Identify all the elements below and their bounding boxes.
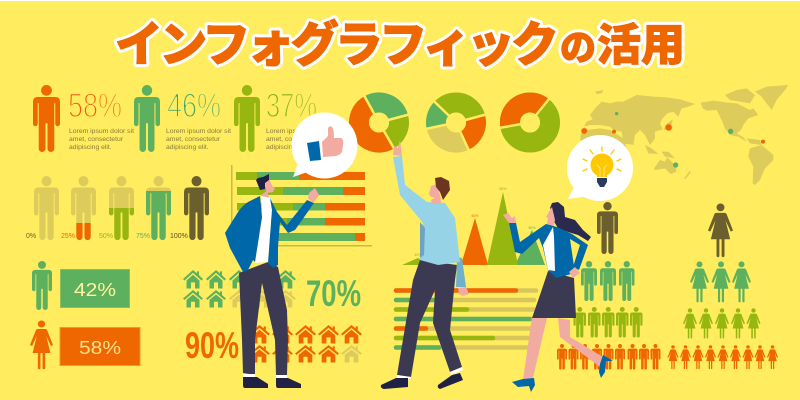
face and neck — [546, 207, 555, 230]
person 75%: 75% — [136, 233, 150, 240]
figure: woman walking — [503, 202, 613, 392]
person 25%: 25% — [61, 233, 75, 240]
person 100%: 100% — [170, 233, 188, 240]
text: 70%: 70% — [306, 273, 361, 314]
stat: 58%: Lorem ipsum dolor sit — [69, 128, 134, 135]
stat: 58%: 58% — [68, 87, 122, 125]
stat: 37%: adipiscing — [266, 144, 296, 151]
stat: 46%: amet, consectetur — [166, 136, 221, 143]
speech bubble: idea — [567, 135, 633, 201]
figure: man reaching up to the donut — [381, 140, 469, 389]
speech bubble: thumbs up — [292, 112, 358, 178]
stat: 46%: adipiscing elit. — [166, 144, 209, 151]
title: インフォグラフィック — [115, 5, 559, 75]
stat: 46%: Lorem ipsum dolor sit — [166, 128, 231, 135]
panel: gender ratio — [30, 261, 140, 369]
chart: triangles: 40% — [414, 253, 422, 257]
trousers — [397, 260, 462, 377]
shoes — [243, 374, 301, 388]
title: 活用 — [597, 9, 685, 73]
hands — [393, 140, 469, 296]
person 25% — [61, 176, 96, 240]
stat: 37%: Lorem ipsum — [266, 128, 306, 135]
title: インフォグラフィック — [115, 5, 559, 75]
sweater — [393, 156, 460, 265]
stat: 37%: amet, con — [266, 136, 296, 143]
shirt — [255, 196, 272, 263]
female 58%: 58% — [79, 338, 121, 358]
chart: triangles: 80% — [499, 187, 507, 191]
chart: triangles — [402, 187, 545, 265]
trousers — [239, 262, 288, 375]
person 75% — [136, 176, 171, 240]
panel: three percentage statistics — [33, 85, 317, 152]
stat: 37%: 37% — [266, 87, 317, 125]
panel: filled people progress row — [26, 176, 209, 240]
icon: light bulb — [583, 147, 621, 187]
jacket — [509, 223, 588, 278]
pyramid: women — [668, 204, 778, 369]
title: 活用 — [597, 9, 685, 73]
chart: horizontal progress lines — [396, 290, 536, 348]
person 0%: 0% — [26, 233, 36, 240]
panel: houses 70% — [183, 270, 361, 314]
stat: 37% — [234, 85, 317, 152]
hair — [550, 202, 591, 241]
chart: donut 3 — [500, 98, 553, 146]
person 50%: 50% — [99, 233, 113, 240]
world map — [580, 85, 788, 185]
jacket — [225, 196, 314, 272]
stat: 46%: 46% — [167, 87, 221, 125]
pyramid: men — [557, 202, 660, 370]
stat: 58% — [33, 85, 134, 152]
title: の — [560, 19, 596, 71]
person 50% — [99, 176, 134, 240]
chart: triangles: 50% — [528, 226, 536, 230]
skirt — [532, 271, 576, 318]
shoes — [512, 355, 613, 392]
stat: 58%: adipiscing elit. — [69, 144, 112, 151]
back arm — [456, 257, 466, 287]
person 0% — [26, 176, 59, 240]
title: の — [560, 19, 596, 71]
shoes — [381, 367, 463, 389]
stat: 46% — [134, 85, 231, 152]
hands — [503, 213, 580, 278]
stat: 58%: amet, consectetur — [69, 136, 124, 143]
chart: stacked horizontal bars — [231, 165, 372, 246]
head — [429, 177, 450, 204]
chart: donut 1 — [352, 95, 409, 150]
donut holes — [369, 112, 540, 132]
text: 90%: 90% — [185, 325, 239, 366]
blouse — [543, 227, 555, 271]
panel: houses 90% — [185, 325, 362, 366]
legs — [523, 317, 603, 382]
male 42%: 42% — [74, 280, 116, 300]
chart: donut 2 — [426, 94, 486, 151]
person 100% — [170, 176, 209, 240]
figure: man pointing at the bar chart — [225, 174, 319, 388]
hand — [308, 188, 319, 203]
chart: triangles: 60% — [471, 214, 479, 218]
icon: thumbs up — [307, 126, 343, 161]
head — [256, 174, 275, 200]
